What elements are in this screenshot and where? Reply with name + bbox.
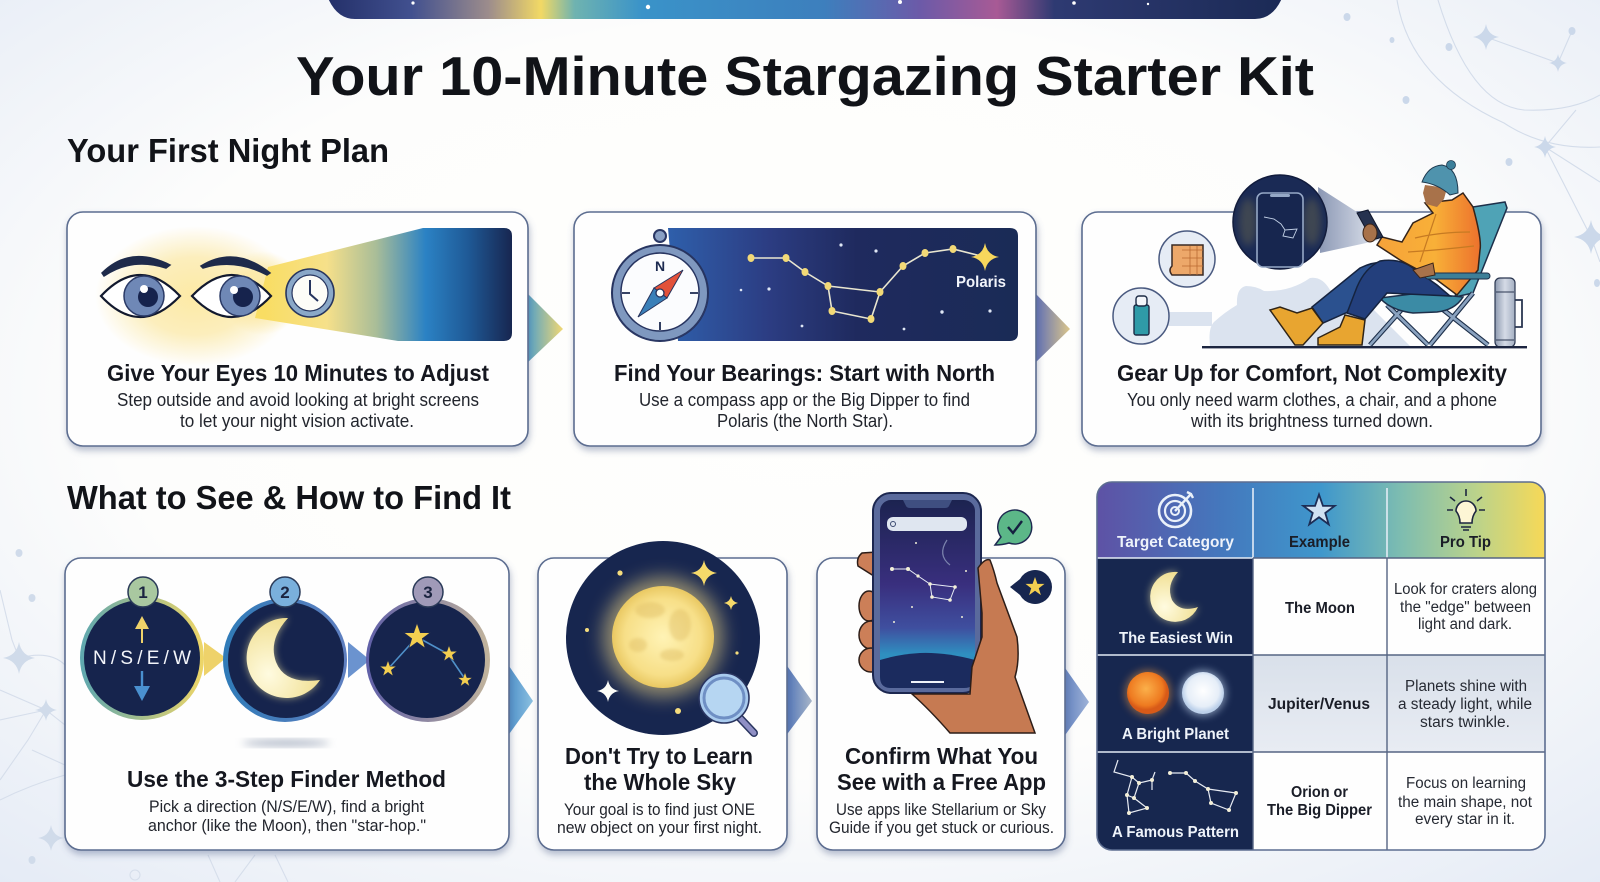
step description — [557, 801, 762, 837]
step description: Guide if you get stuck or curious. — [829, 819, 1054, 837]
front leg — [1347, 260, 1450, 319]
table: what to see — [1097, 482, 1545, 850]
hand: palm and thumb — [912, 560, 1035, 733]
category label: The Easiest Win — [1119, 630, 1233, 647]
example — [1267, 784, 1372, 819]
back leg — [1312, 262, 1385, 323]
yellow glow behind eyes — [95, 226, 304, 366]
chair — [1370, 202, 1507, 345]
icon: orion and big dipper — [1114, 760, 1238, 815]
face — [1423, 185, 1447, 207]
arrow: step 1 to step 2 — [526, 292, 563, 364]
step description: anchor (like the Moon), then "star-hop." — [148, 817, 426, 835]
pro tip — [1398, 678, 1532, 731]
table shaded row — [1253, 655, 1545, 752]
pro tip: stars twinkle. — [1420, 714, 1510, 731]
step description — [639, 390, 970, 431]
icon: green check bubble — [995, 510, 1032, 545]
step heading — [837, 743, 1046, 795]
example: Orion or — [1291, 784, 1348, 801]
step heading: Find Your Bearings: Start with North — [614, 360, 995, 386]
icon: compass — [612, 230, 708, 345]
header label: example: Example — [1289, 534, 1350, 551]
phone with stargazing app — [873, 493, 981, 693]
icon: target — [1159, 492, 1193, 527]
step description: Use apps like Stellarium or Sky — [836, 801, 1047, 819]
ground line — [1202, 346, 1527, 348]
arrow: learn to app — [785, 663, 812, 737]
example: Jupiter/Venus — [1268, 696, 1370, 713]
heading: What to See and How to Find It: What to See & How to Find It — [67, 479, 511, 516]
decorative constellation top right — [1344, 0, 1600, 287]
cone of view from phone — [1318, 187, 1380, 253]
table outline — [1097, 482, 1545, 850]
jacket — [1377, 193, 1480, 295]
pro tip: Focus on learning — [1406, 775, 1526, 792]
table left column — [1097, 558, 1253, 850]
panel: find your bearings — [574, 212, 1036, 446]
step description: with its brightness turned down. — [1190, 411, 1433, 431]
pro tip — [1398, 775, 1533, 828]
illustration: person in camping chair — [1270, 160, 1507, 345]
table example and tip cells — [1254, 606, 1544, 850]
step heading: Give Your Eyes 10 Minutes to Adjust — [107, 360, 489, 386]
step heading: Gear Up for Comfort, Not Complexity — [1117, 360, 1507, 386]
category label: A Bright Planet — [1122, 726, 1230, 743]
icon: eyes — [101, 257, 271, 317]
icon: jupiter and venus — [1125, 670, 1226, 716]
header label: pro tip: Pro Tip — [1440, 534, 1491, 551]
step description: Your goal is to find just ONE — [564, 801, 755, 819]
icon: water bottle — [1113, 288, 1169, 344]
step description — [117, 390, 479, 431]
armrest — [1425, 273, 1490, 279]
icon: clock — [286, 269, 334, 317]
step description: Use a compass app or the Big Dipper to find — [639, 390, 970, 410]
panel: give your eyes 10 minutes — [67, 212, 528, 446]
pro tip: the "edge" between — [1400, 599, 1531, 616]
step circle 1: direction: N / S / E / W — [93, 648, 191, 669]
big dipper constellation — [748, 243, 999, 323]
step heading — [565, 743, 753, 795]
decorative constellation left — [0, 549, 288, 882]
icon: star bubble — [1010, 570, 1052, 604]
hat — [1422, 160, 1458, 195]
scattered stars — [740, 243, 992, 330]
icon: map — [1159, 231, 1215, 287]
pro tip — [1394, 581, 1537, 633]
pro tip: every star in it. — [1415, 811, 1515, 828]
example: The Big Dipper — [1267, 802, 1372, 819]
arrow: app to table — [1063, 665, 1089, 738]
boots — [1270, 307, 1365, 345]
step description: to let your night vision activate. — [180, 411, 414, 431]
icon: star outline — [1303, 494, 1335, 524]
pro tip: Planets shine with — [1405, 678, 1527, 695]
panel: gear up for comfort — [1082, 160, 1541, 446]
heading: Your First Night Plan: Your First Night Plan — [67, 132, 389, 169]
step circle 1: direction — [80, 577, 226, 720]
step circle 3: star-hop — [366, 577, 490, 722]
row: a famous pattern — [1112, 760, 1533, 841]
icon: thermos — [1495, 278, 1522, 347]
app search bar — [887, 517, 967, 531]
step heading: the Whole Sky — [584, 769, 736, 795]
row: a bright planet — [1122, 670, 1532, 743]
step description: new object on your first night. — [557, 819, 762, 837]
step description — [829, 801, 1054, 837]
icon: light bulb — [1447, 489, 1485, 530]
step description: Pick a direction (N/S/E/W), find a bright — [149, 798, 424, 816]
step circle 2: anchor moon: 2 — [280, 583, 290, 602]
icon: phone close-up — [1233, 175, 1327, 269]
hands and phone — [1357, 210, 1435, 278]
category label: A Famous Pattern — [1112, 824, 1239, 841]
Polaris label: Polaris — [956, 274, 1006, 291]
step circle 3: star-hop: 3 — [423, 583, 433, 602]
icon: crescent moon — [1150, 572, 1198, 622]
title: Your 10-Minute Stargazing Starter Kit — [296, 45, 1314, 107]
top banner — [325, 0, 1285, 19]
example: The Moon — [1285, 600, 1355, 617]
step heading: Don't Try to Learn — [565, 743, 753, 769]
cloud backdrop — [1168, 278, 1410, 346]
pro tip: a steady light, while — [1398, 696, 1532, 713]
pro tip: Look for craters along — [1394, 581, 1537, 598]
table header row — [1097, 482, 1545, 558]
step circle 2: anchor moon — [223, 577, 370, 722]
pro tip: the main shape, not — [1398, 794, 1533, 811]
step description: Polaris (the North Star). — [717, 411, 893, 431]
step heading: See with a Free App — [837, 769, 1046, 795]
moon night circle — [566, 541, 760, 735]
night sky panel — [668, 228, 1018, 341]
panel: confirm with a free app — [817, 493, 1065, 850]
step heading: Confirm What You — [845, 743, 1038, 769]
panel: 3-step finder method — [65, 558, 509, 850]
header label: target category: Target Category — [1117, 534, 1234, 551]
step description — [1127, 390, 1497, 431]
icon: compass: N — [655, 258, 665, 274]
light beam fading to night sky — [255, 228, 512, 341]
step heading: Use the 3-Step Finder Method — [127, 766, 446, 792]
arrow: step 2 to step 3 — [1034, 292, 1070, 364]
step description: Step outside and avoid looking at bright screens — [117, 390, 479, 410]
hand: fingers behind phone — [858, 552, 883, 672]
step description: You only need warm clothes, a chair, and a phone — [1127, 390, 1497, 410]
icon: magnifying glass — [699, 673, 754, 733]
step description — [148, 798, 426, 835]
soft shadow — [242, 740, 330, 746]
step circle 1: direction: 1 — [138, 583, 148, 602]
arrow: finder method to learn — [507, 663, 533, 737]
panel: don't try to learn the whole sky — [538, 541, 787, 850]
pro tip: light and dark. — [1418, 616, 1512, 633]
row: the moon — [1119, 572, 1537, 647]
